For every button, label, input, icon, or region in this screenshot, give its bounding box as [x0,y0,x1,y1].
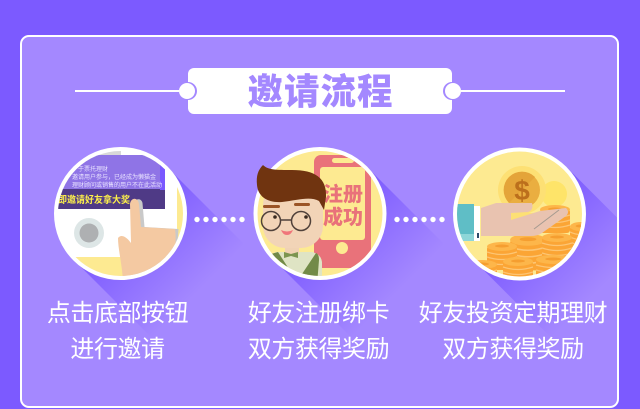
connector dots right [394,217,445,222]
caption: step 2 [248,300,389,362]
caption: step 1 [47,300,188,362]
icon: tapping finger on button [54,147,230,324]
icon: tapping finger on button: 于票托理财 [78,165,108,173]
caption: step 2: 好友注册绑卡 [248,300,389,326]
heading: 邀请流程 [248,63,394,115]
icon: registered friend with phone [254,147,430,324]
caption: step 3: 双方获得奖励 [442,336,584,362]
icon: tapping finger on button: 邀请用户参与，已经成为懒猫金 [72,173,156,181]
caption: step 2: 双方获得奖励 [248,336,389,362]
title banner [75,63,565,115]
icon: registered friend with phone: 注册 [323,178,363,207]
caption: step 1: 进行邀请 [70,336,165,362]
icon: tapping finger on button: 即邀请好友拿大奖 [58,194,130,206]
icon: hand with coins: $ [514,175,530,206]
caption: step 1: 点击底部按钮 [47,300,188,326]
icon: tapping finger on button: 理财顾问或销售的用户不在此活动 [72,181,162,189]
caption: step 3: 好友投资定期理财 [419,300,607,326]
icon: registered friend with phone: 成功 [323,201,363,230]
icon: hand with coins [453,148,617,324]
connector dots left [194,217,245,222]
caption: step 3 [419,300,607,362]
